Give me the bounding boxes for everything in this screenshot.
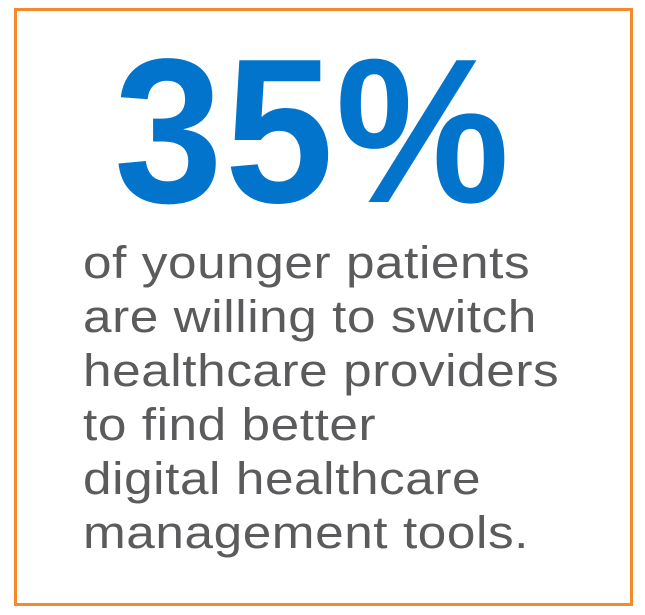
text block: description: to find better	[83, 399, 376, 450]
text block: description: are willing to switch	[83, 291, 537, 342]
text block: description: management tools.	[83, 507, 529, 558]
text block: description: of younger patients	[83, 237, 530, 288]
text block: description: digital healthcare	[83, 453, 481, 504]
text block: description: healthcare providers	[83, 345, 559, 396]
headline number: 35%	[114, 16, 511, 246]
text block: description	[83, 237, 559, 558]
